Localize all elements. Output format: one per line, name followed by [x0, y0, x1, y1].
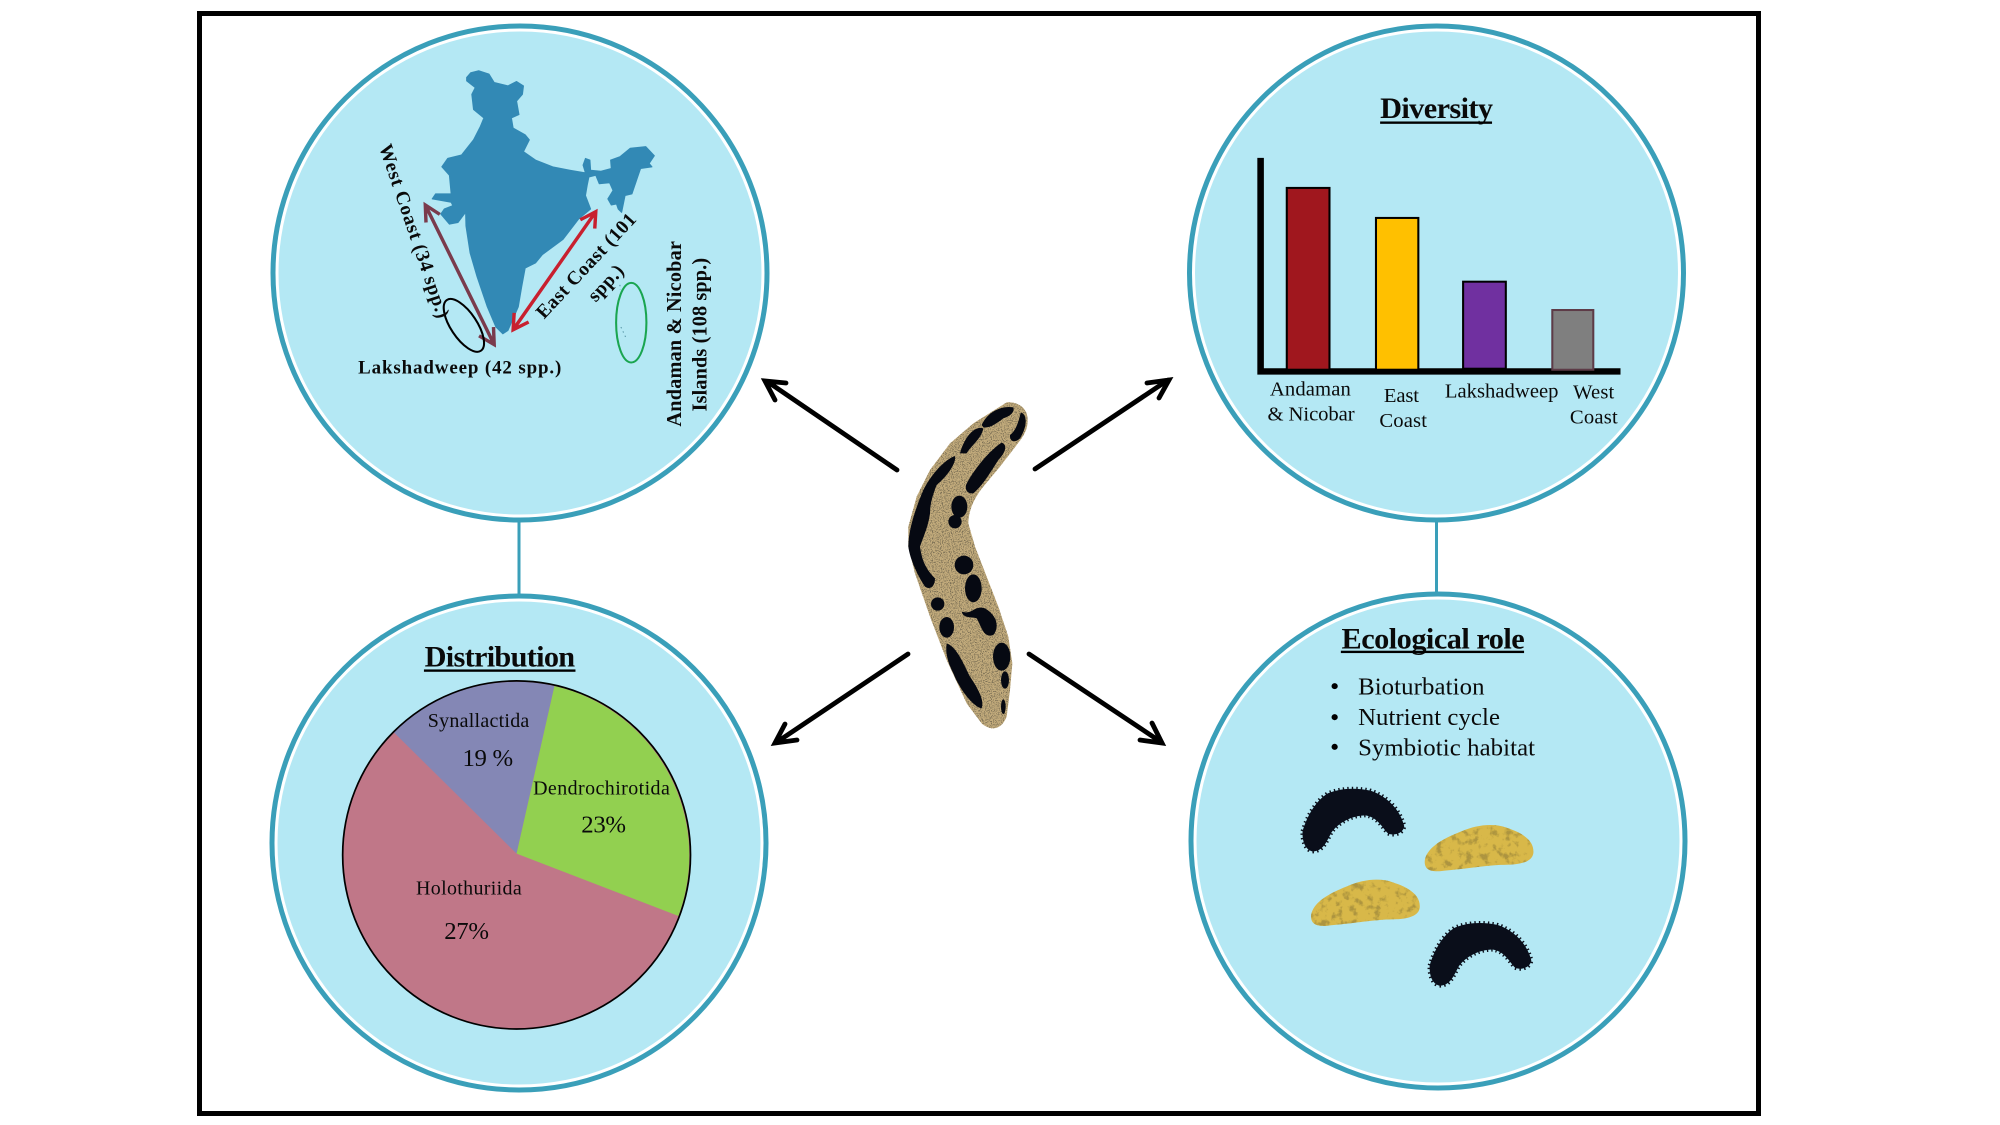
value: 23 percent: 23% [581, 812, 626, 839]
connector: diversity to ecological role [1435, 520, 1438, 596]
panel: distribution pie chart [272, 596, 766, 1090]
label: Coast: Coast [1379, 410, 1427, 432]
arrow: east coast [513, 212, 596, 330]
arrow: to distribution [775, 654, 908, 743]
heading underline [1380, 121, 1492, 124]
label: and Nicobar: & Nicobar [1267, 403, 1355, 425]
ellipse: Andaman and Nicobar [616, 283, 646, 362]
outer frame [200, 14, 1758, 1114]
icon: golden sea cucumber [1425, 825, 1533, 871]
label: Lakshadweep: Lakshadweep [1445, 381, 1559, 403]
icon: black sea cucumber [1303, 789, 1404, 851]
heading: Ecological role: Ecological role [1342, 623, 1525, 656]
islands specks [620, 285, 626, 339]
panel: diversity bar chart [1190, 26, 1684, 520]
icon: black sea cucumber [1430, 923, 1531, 986]
arrow: to map [765, 381, 897, 470]
bullet list [1332, 674, 1535, 761]
panel: map of India species distribution [273, 26, 767, 520]
label: Andaman and Nicobar: Andaman & Nicobar [664, 241, 686, 427]
ellipse: Lakshadweep [436, 293, 492, 358]
bar: West Coast [1552, 310, 1593, 370]
heading: Distribution: Distribution [425, 641, 575, 674]
label: Holothuriida: Holothuriida [416, 878, 522, 900]
label: West Coast: Coast [1570, 407, 1618, 429]
bar: Lakshadweep [1463, 282, 1506, 369]
label: Andaman: Andaman [1270, 379, 1351, 401]
label: East: East [1384, 385, 1419, 407]
connector: map to distribution [518, 520, 520, 596]
label: Lakshadweep: Lakshadweep (42 spp.) [358, 358, 561, 379]
label: east coast second line: spp.) [584, 261, 629, 306]
panel: ecological role [1191, 594, 1685, 1088]
label: west coast: West Coast (34 spp.) [374, 142, 453, 321]
heading: Diversity: Diversity [1380, 92, 1493, 125]
central sea cucumber [908, 402, 1028, 728]
arrow: west coast [425, 205, 494, 345]
label: Islands: Islands (108 spp.) [689, 258, 711, 411]
value: 27 percent: 27% [444, 918, 489, 945]
value: 19 percent: 19 % [463, 745, 513, 772]
bar chart axes [1261, 158, 1620, 371]
heading underline [424, 669, 575, 672]
label: Dendrochirotida: Dendrochirotida [533, 778, 670, 800]
bullet list: Symbiotic habitat [1358, 734, 1535, 761]
pie chart [343, 681, 690, 1029]
bar: East Coast [1376, 218, 1418, 370]
bar: Andaman and Nicobar [1287, 188, 1329, 370]
heading underline [1341, 651, 1524, 653]
icon: golden sea cucumber [1311, 880, 1420, 926]
arrow: to diversity [1035, 380, 1169, 469]
arrow: to ecological role [1029, 654, 1162, 743]
label: east coast: East Coast (101 [532, 209, 641, 323]
map of India [432, 71, 654, 334]
label: West: West [1573, 382, 1615, 403]
label: Synallactida: Synallactida [428, 710, 530, 732]
bullet list: Bioturbation [1358, 674, 1484, 701]
bullet list: Nutrient cycle [1358, 704, 1500, 731]
